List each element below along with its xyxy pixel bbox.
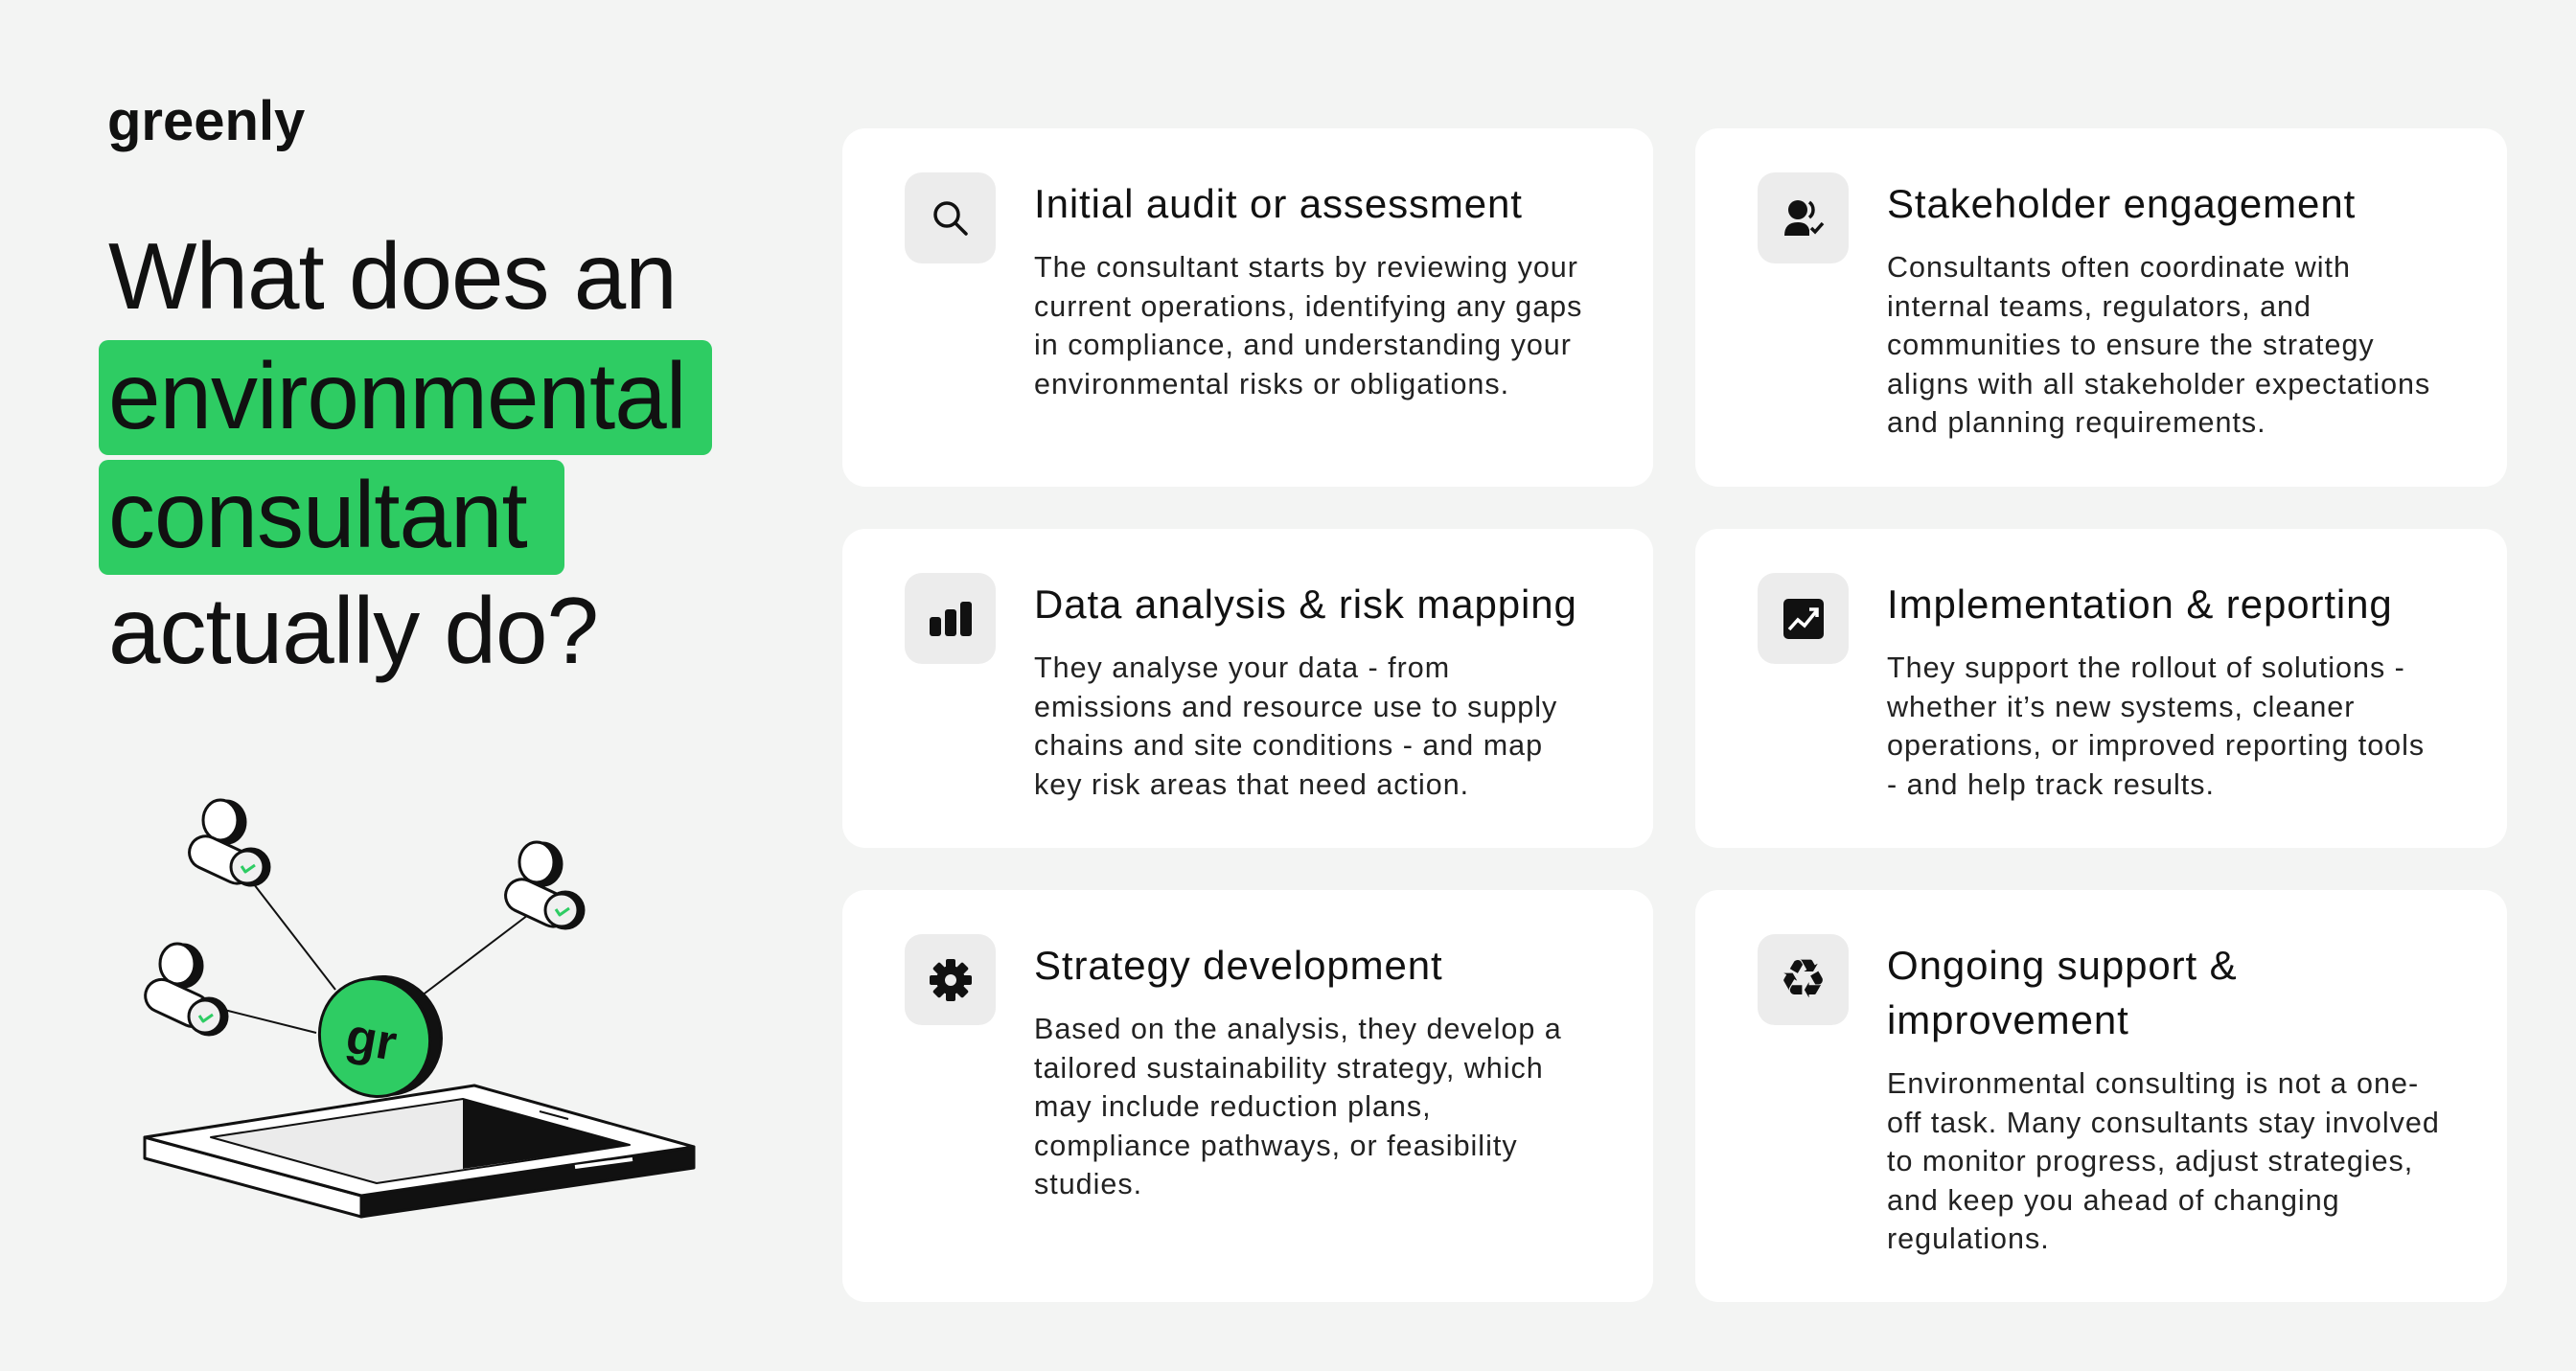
heading: Strategy development	[1034, 943, 1443, 988]
card: stakeholder engagement	[1695, 128, 2507, 487]
icon: magnifier	[905, 172, 996, 263]
body: environmental risks or obligations.	[1034, 368, 1509, 400]
connection lines	[220, 884, 532, 1033]
body: chains and site conditions - and map	[1034, 729, 1543, 762]
body: Based on the analysis, they develop a	[1034, 1013, 1562, 1045]
heading: Stakeholder engagement	[1887, 181, 2356, 226]
person 3	[140, 944, 227, 1035]
body: key risk areas that need action.	[1034, 768, 1469, 801]
tablet	[145, 1085, 694, 1217]
body: internal teams, regulators, and	[1887, 290, 2312, 323]
body: emissions and resource use to supply	[1034, 691, 1557, 723]
body	[1034, 251, 1582, 400]
body: regulations.	[1887, 1222, 2050, 1255]
body: Consultants often coordinate with	[1887, 251, 2351, 284]
body: current operations, identifying any gaps	[1034, 290, 1582, 323]
body: communities to ensure the strategy	[1887, 329, 2375, 361]
highlight: environmental	[99, 340, 712, 455]
logo: greenly	[107, 90, 305, 152]
icon: bar chart	[905, 573, 996, 664]
icon: recycle	[1758, 934, 1849, 1025]
coin: gr	[342, 1009, 401, 1072]
body: tailored sustainability strategy, which	[1034, 1052, 1544, 1085]
highlight: consultant	[99, 460, 564, 575]
body: - and help track results.	[1887, 768, 2215, 801]
body: aligns with all stakeholder expectations	[1887, 368, 2430, 400]
illustration: network of people around coin above tablet	[144, 799, 696, 1219]
body: to monitor progress, adjust strategies,	[1887, 1145, 2413, 1177]
body: off task. Many consultants stay involved	[1887, 1107, 2440, 1139]
body: The consultant starts by reviewing your	[1034, 251, 1578, 284]
person 2	[500, 842, 584, 932]
title line 1: What does an	[108, 223, 677, 329]
body: They analyse your data - from	[1034, 651, 1450, 684]
title	[99, 223, 712, 683]
body: in compliance, and understanding your	[1034, 329, 1572, 361]
icon: trend chart	[1758, 573, 1849, 664]
heading: improvement	[1887, 997, 2129, 1042]
coin	[303, 961, 458, 1112]
body	[1887, 251, 2430, 439]
card: implementation	[1695, 529, 2507, 848]
heading: Initial audit or assessment	[1034, 181, 1523, 226]
title line 2: environmental	[108, 343, 686, 448]
card: ongoing support	[1695, 890, 2507, 1302]
title line 3: consultant	[108, 462, 527, 567]
body: and keep you ahead of changing	[1887, 1184, 2340, 1217]
title line 4: actually do?	[108, 578, 598, 683]
body: studies.	[1034, 1168, 1142, 1200]
body: and planning requirements.	[1887, 406, 2266, 439]
heading: Data analysis & risk mapping	[1034, 582, 1577, 627]
card: initial audit	[842, 128, 1653, 487]
card: strategy development	[842, 890, 1653, 1302]
body: whether it’s new systems, cleaner	[1887, 691, 2355, 723]
body: may include reduction plans,	[1034, 1090, 1432, 1123]
heading: Implementation & reporting	[1887, 582, 2393, 627]
body: Environmental consulting is not a one-	[1887, 1067, 2419, 1100]
card: data analysis	[842, 529, 1653, 848]
body: compliance pathways, or feasibility	[1034, 1130, 1518, 1162]
heading: Ongoing support &	[1887, 943, 2238, 988]
heading	[1887, 943, 2238, 1042]
person 1	[184, 800, 269, 889]
body	[1887, 1067, 2440, 1255]
body: operations, or improved reporting tools	[1887, 729, 2425, 762]
body	[1887, 651, 2425, 801]
body: They support the rollout of solutions -	[1887, 651, 2405, 684]
icon: recycle: ♻	[1779, 948, 1828, 1010]
body	[1034, 651, 1557, 801]
icon: gear	[905, 934, 996, 1025]
icon: person check	[1758, 172, 1849, 263]
body	[1034, 1013, 1562, 1200]
